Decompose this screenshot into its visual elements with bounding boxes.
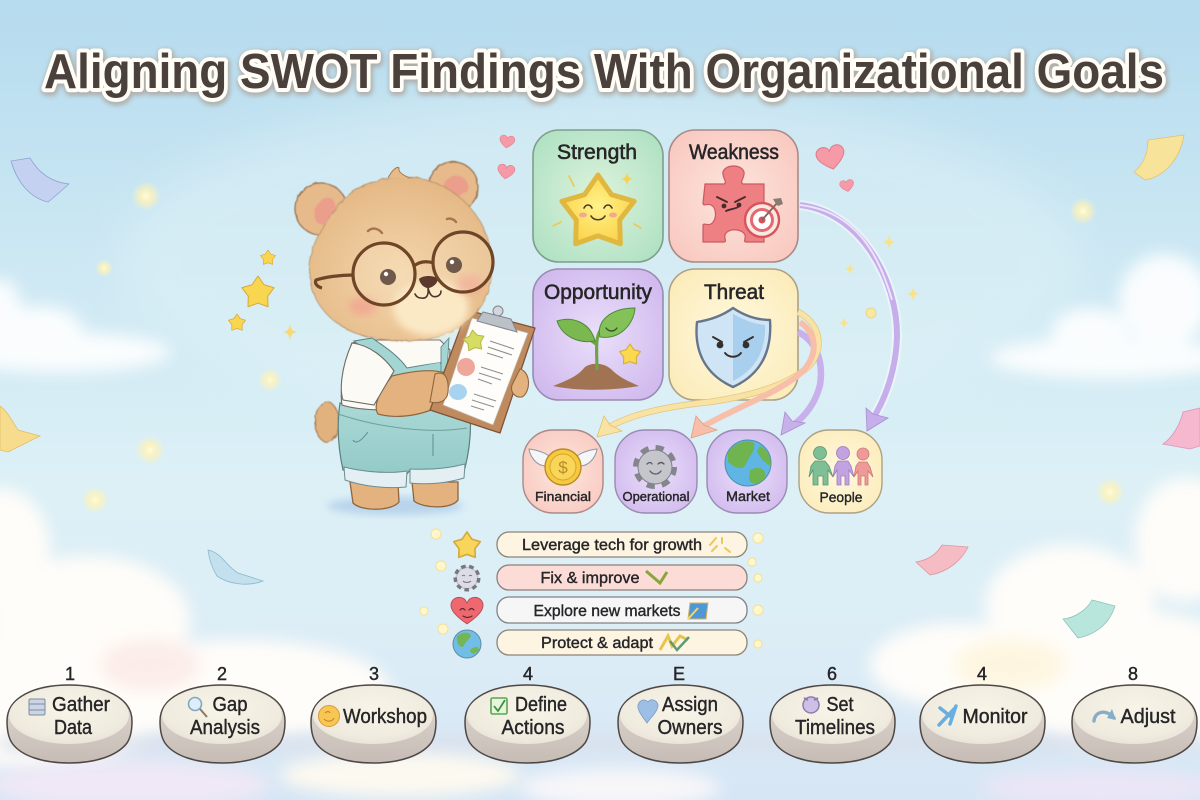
panel: strength [533, 130, 663, 262]
sparkle stars [228, 250, 297, 340]
panel: threat [669, 269, 798, 400]
bear arm [376, 371, 449, 416]
bear feet [350, 482, 458, 509]
step 1: gather data: Data [54, 717, 93, 739]
step 4: define actions: 4 [523, 664, 533, 684]
bear overalls [338, 403, 470, 488]
step 5: assign owners: E [673, 664, 685, 684]
confetti papers [0, 135, 1200, 638]
step 1: gather data: Gather [52, 694, 110, 716]
heading: threat: Threat [704, 281, 764, 304]
icon: plane [939, 706, 956, 725]
step 2: gap analysis: Analysis [190, 717, 260, 739]
step 4: define actions: Actions [502, 717, 564, 739]
heading: opportunity: Opportunity [544, 281, 652, 304]
glowing dots [81, 181, 1125, 514]
step 8: adjust [1072, 664, 1197, 763]
panel: weakness [669, 130, 798, 262]
panel: market [707, 430, 787, 513]
step 6: set timelines: Timelines [795, 717, 875, 739]
action: fix and improve [456, 565, 747, 590]
step 2: gap analysis: Gap [212, 694, 248, 716]
icon: three people [809, 446, 873, 485]
action list [420, 529, 763, 658]
bear shirt [341, 338, 450, 410]
icon: timer [803, 697, 819, 713]
icon: star [553, 172, 641, 244]
label: people: People [820, 490, 862, 505]
icon: checkbox [491, 698, 507, 714]
icon: data list [29, 699, 45, 715]
action: explore new markets [451, 597, 747, 624]
panel: operational [615, 430, 697, 513]
step 2: gap analysis [160, 664, 285, 763]
icon: magnifier [188, 698, 207, 717]
action: explore new markets: Explore new markets [534, 603, 680, 620]
sparkles right [839, 234, 920, 329]
icon: puzzle piece with target [703, 166, 783, 242]
step 3: workshop: Workshop [343, 706, 427, 728]
panel: opportunity [533, 269, 663, 400]
bear hands [430, 369, 529, 403]
action: protect and adapt: Protect & adapt [541, 635, 654, 652]
step 5: assign owners: Assign [662, 694, 718, 716]
arrow: threat to market [781, 332, 821, 435]
step 7: monitor [920, 664, 1045, 763]
label: financial: Financial [535, 489, 591, 504]
step 2: gap analysis: 2 [217, 664, 227, 684]
list glow dots [420, 529, 763, 648]
bear character [295, 162, 535, 515]
bear face [349, 219, 483, 336]
step 6: set timelines: 6 [827, 664, 837, 684]
arrow: threat to operational [691, 322, 814, 438]
icon: heart shield [638, 700, 658, 723]
step 1: gather data [7, 664, 132, 763]
bear ground shadow [327, 497, 463, 515]
action: leverage tech: Leverage tech for growth [522, 537, 702, 554]
icon: winged coin: $ [558, 458, 568, 477]
arrow: threat to financial [597, 312, 819, 437]
step 7: monitor: 4 [977, 664, 987, 684]
clouds [0, 254, 1200, 800]
arrow: weakness to people [800, 205, 897, 431]
panel: financial [523, 430, 603, 513]
label: market: Market [726, 489, 770, 504]
heading: strength: Strength [557, 141, 637, 164]
action: leverage tech [454, 532, 747, 557]
action: fix and improve: Fix & improve [540, 570, 640, 587]
step 5: assign owners [618, 664, 743, 763]
heading: weakness: Weakness [689, 141, 779, 164]
icon: adjust arrows [1094, 709, 1116, 721]
bear ears [295, 162, 478, 235]
step 6: set timelines [770, 664, 895, 763]
hearts [497, 135, 855, 193]
step 8: adjust: 8 [1128, 664, 1138, 684]
icon: gear [636, 448, 674, 486]
icon: globe [725, 440, 771, 486]
clipboard [430, 306, 535, 433]
shirt sleeve [341, 343, 394, 405]
step 8: adjust: Adjust [1120, 706, 1176, 728]
step 4: define actions [465, 664, 590, 763]
step 6: set timelines: Set [826, 694, 854, 716]
bear tail [315, 402, 339, 442]
step 4: define actions: Define [515, 694, 567, 716]
bear head [309, 177, 492, 341]
action: protect and adapt [453, 630, 747, 658]
icon: smile badge [318, 706, 340, 726]
step 1: gather data: 1 [65, 664, 75, 684]
step 7: monitor: Monitor [962, 706, 1028, 728]
label: operational: Operational [622, 489, 690, 504]
icon: sprout [553, 308, 640, 390]
step 3: workshop: 3 [369, 664, 379, 684]
step 5: assign owners: Owners [658, 717, 722, 739]
step 3: workshop [311, 664, 436, 763]
panel: people [799, 430, 882, 513]
bear glasses [315, 232, 493, 305]
icon: shield [696, 308, 770, 387]
